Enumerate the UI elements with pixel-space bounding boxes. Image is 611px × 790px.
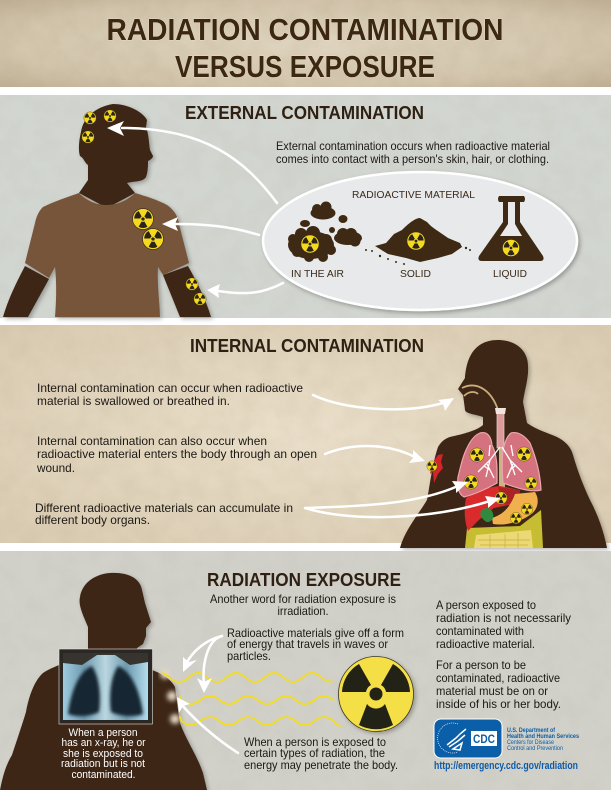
organ: right lung [502,433,541,491]
text: external description: External contamination occurs when radioactive material [276,139,550,153]
airway [462,385,498,410]
text: swallowed or breathed [37,381,303,408]
arrow: to skin [207,283,283,298]
heading: radiation exposure: RADIATION EXPOSURE [207,570,401,590]
organ: gallbladder [480,508,493,522]
text: external description: comes into contact with a person's skin, hair, or clothing. [276,152,549,166]
arrow: to lung [305,481,468,508]
icons: radioactive particles on the man [82,110,206,305]
logo: CDC and HHS: Centers for Disease [507,740,555,746]
arrow: to hair [107,121,277,203]
text: irradiation: Another word for radiation exposure is [210,592,396,606]
text: exposed versus contaminated: material must be on or [436,684,548,698]
text: exposed versus contaminated: contaminated with [436,624,524,638]
text: waves or particles: Radioactive materials give off a form [227,626,404,640]
caption: x-ray [61,727,146,781]
icons: radioactive particles in organs [427,447,537,524]
heading: external contamination: EXTERNAL CONTAMINATION [185,103,424,123]
text: waves or particles: particles. [227,649,271,663]
text: external description [276,139,550,166]
text: exposed versus contaminated: radioactive material. [436,637,535,651]
panel: radioactive material oval [263,172,577,310]
arrow: to clothing [162,217,259,235]
text: irradiation: irradiation. [278,604,328,618]
logo: CDC and HHS [434,719,580,758]
title [106,12,504,84]
arrow: to liver [305,496,500,517]
text: swallowed or breathed: material is swallowed or breathed in. [37,394,230,408]
arrow: to wound [325,446,425,463]
text: penetrate the body: certain types of radiation, the [244,746,385,760]
caption: x-ray: When a person [68,727,138,739]
link: emergency.cdc.gov/radiation: http://emergency.cdc.gov/radiation [434,760,578,772]
glow: penetration points on the shoulder [160,669,180,724]
panel: external contamination [0,95,611,318]
labels: material types: LIQUID [493,269,527,280]
text: body organs: different body organs. [35,513,150,527]
title: RADIATION CONTAMINATION [106,12,504,47]
text: open wound [36,434,317,475]
icon: cloud of radioactive material in the air [288,202,362,262]
organ: stomach [492,492,538,525]
logo: CDC and HHS: Health and Human Services [507,734,580,740]
labels: material types [291,269,527,280]
text: waves or particles: of energy that travels in waves or [227,637,388,651]
logo: CDC and HHS: U.S. Department of [507,728,556,734]
heading: internal contamination: INTERNAL CONTAMINATION [190,336,424,356]
x-ray image [59,649,152,724]
arrow: to mouth [313,395,454,411]
figure: man silhouette [0,573,207,790]
text: body organs [35,501,293,527]
text: body organs: Different radioactive materials can accumulate in [35,501,293,515]
title: VERSUS EXPOSURE [175,49,435,84]
text: irradiation [210,592,396,618]
text: exposed versus contaminated: contaminated, radioactive [436,671,560,685]
text: swallowed or breathed: Internal contamination can occur when radioactive [37,381,303,395]
panel: internal contamination [0,325,611,548]
wound [430,454,443,483]
text: waves or particles [227,626,404,663]
text: exposed versus contaminated: radiation is not necessarily [436,611,571,625]
waves: radiation [163,673,340,726]
organ: trachea [497,410,504,448]
organ: liver [465,486,520,531]
icons: symbols on the oval [301,232,520,257]
logo: CDC and HHS: Control and Prevention [507,746,563,752]
text: exposed versus contaminated: A person exposed to [436,598,536,612]
text: exposed versus contaminated: For a person to be [436,658,526,672]
icon: flask of radioactive liquid [478,196,544,261]
panel: title banner [0,0,611,87]
text: penetrate the body: energy may penetrate the body. [244,758,398,772]
organ: left lung [458,433,497,497]
icon: large radiation symbol [338,656,414,732]
caption: x-ray: radiation but is not [61,758,145,770]
organ: colon [465,510,543,548]
icon: solid radioactive pile [365,218,471,265]
caption: x-ray: contaminated. [72,769,136,781]
arrows: from waves text to waves [183,636,222,693]
organ: small intestine [474,530,533,548]
organ: bronchi [478,445,522,478]
caption: x-ray: she is exposed to [63,748,143,760]
text: penetrate the body [244,735,398,772]
arrow: energy into the body [177,697,238,753]
panel: radiation exposure [0,551,611,790]
text: exposed versus contaminated: inside of his or her body. [436,697,561,711]
text: exposed versus contaminated [436,598,571,711]
figure: man in brown t-shirt [3,104,211,317]
text: open wound: Internal contamination can also occur when [37,434,267,448]
labels: material types: IN THE AIR [291,269,344,280]
labels: material types: SOLID [400,269,431,280]
label: radioactive material: RADIOACTIVE MATERIAL [352,190,475,201]
caption: x-ray: has an x-ray, he or [62,737,146,749]
text: open wound: radioactive material enters the body through an open [37,447,317,461]
text: penetrate the body: When a person is exposed to [244,735,386,749]
figure: man silhouette with organs [400,340,607,548]
logo: CDC and HHS: CDC [473,734,495,746]
organ: esophagus [499,445,505,487]
text: open wound: wound. [36,461,75,475]
